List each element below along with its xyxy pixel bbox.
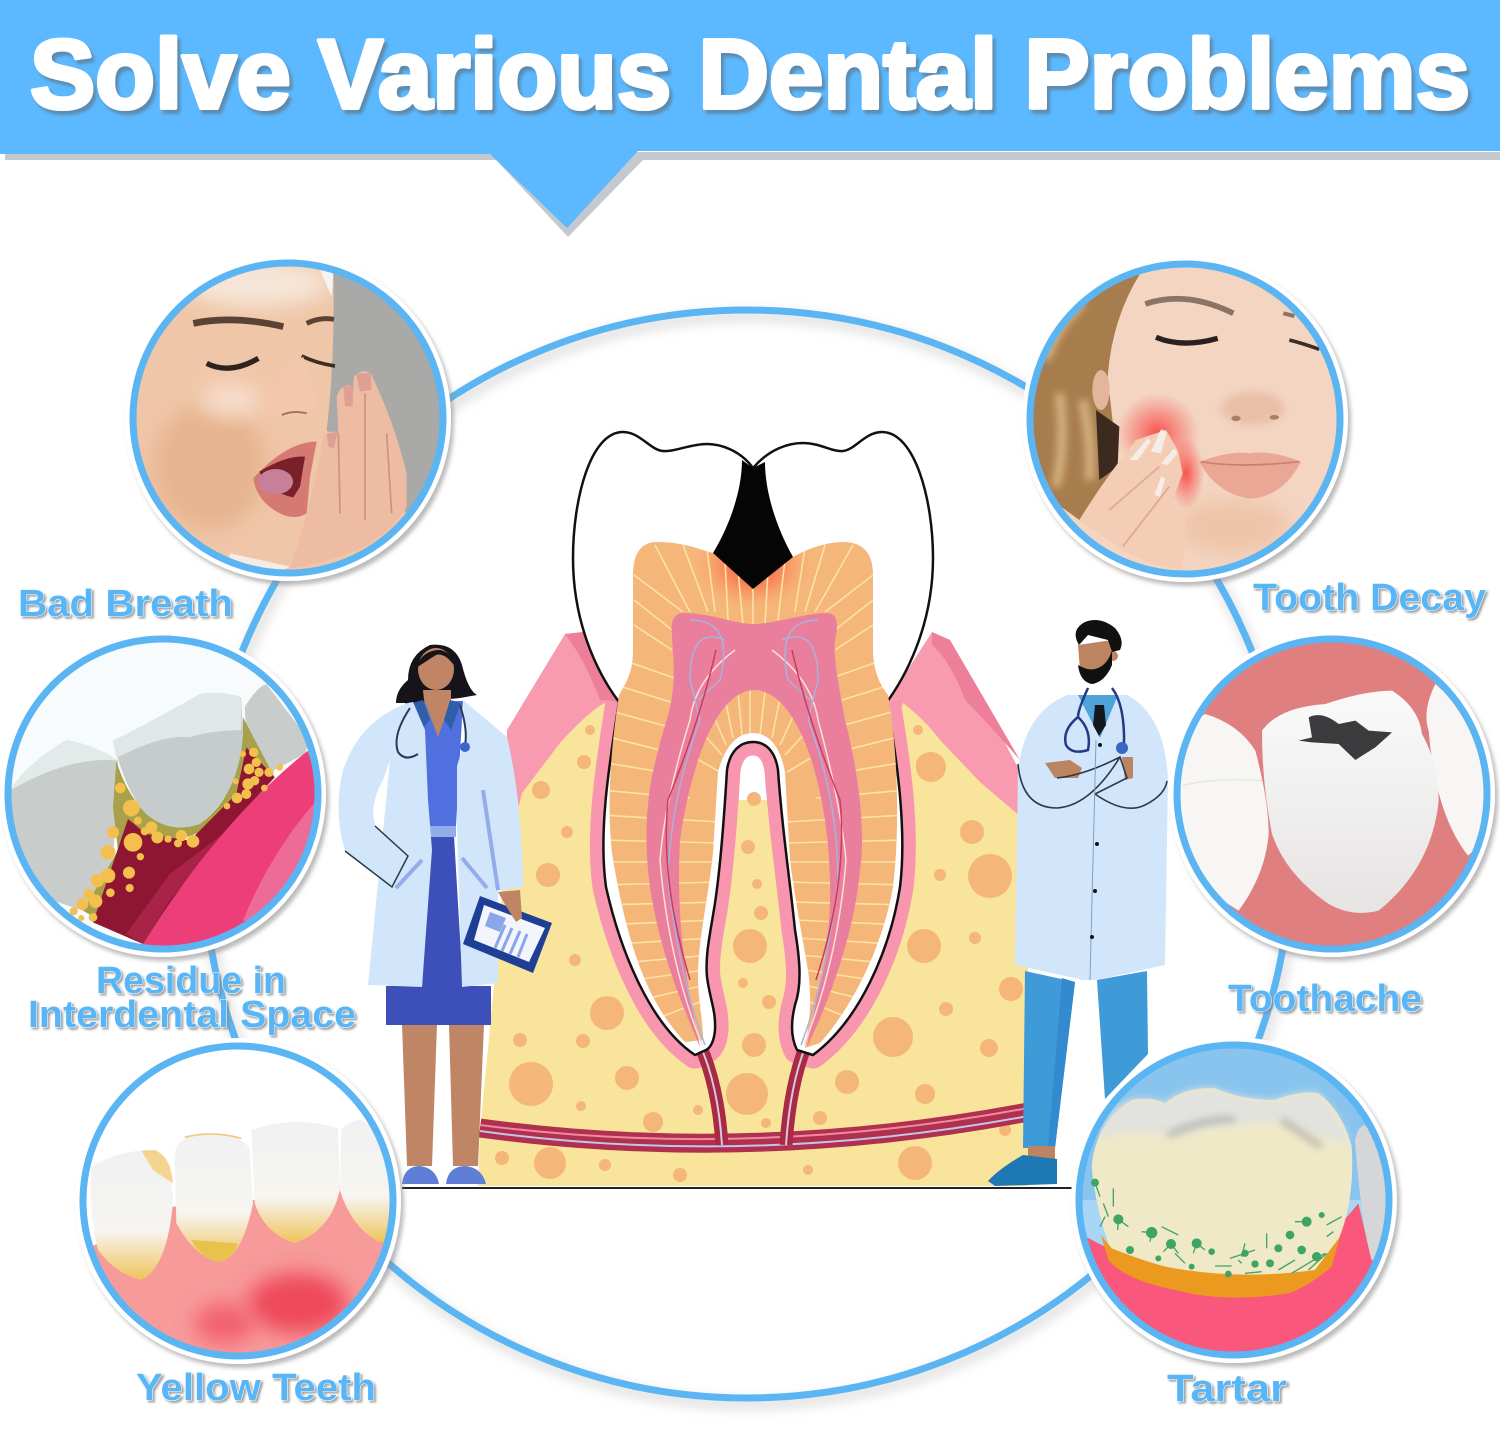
photo: yellow teeth (75, 1038, 401, 1364)
collar (412, 700, 461, 730)
nerve and blood vessels (480, 1045, 1028, 1146)
label: yellow teeth: Yellow Teeth (136, 1367, 376, 1409)
shirt (405, 701, 463, 826)
ankle (1028, 1146, 1055, 1160)
neck and face (423, 690, 451, 737)
label: residue in interdental space: Interdental Space (28, 994, 356, 1036)
dentin (610, 542, 898, 1048)
label: bad breath: Bad Breath (18, 583, 233, 625)
hand (498, 890, 522, 922)
trousers (1023, 971, 1075, 1148)
coat (338, 702, 432, 987)
clipboard (463, 896, 552, 973)
arm hand left (1045, 760, 1082, 778)
coat seam and buttons (1090, 740, 1102, 980)
shoes (402, 1166, 439, 1184)
arm outlines (1018, 757, 1167, 808)
photo: residue in interdental space (0, 631, 326, 957)
label: residue in interdental space (28, 960, 356, 1036)
label: residue in interdental space: Residue in (96, 960, 286, 1002)
head and beard (1078, 640, 1112, 684)
tooth enamel (573, 432, 933, 1055)
label: tartar: Tartar (1167, 1368, 1287, 1410)
belt (428, 826, 456, 837)
stethoscope (1065, 688, 1124, 752)
label: toothache: Toothache (1228, 978, 1422, 1020)
female doctor (338, 645, 552, 1184)
photo: tooth decay (1022, 256, 1348, 582)
photo: bad breath (125, 255, 451, 581)
title: Solve Various Dental Problems (30, 19, 1470, 129)
photo: toothache (1169, 631, 1495, 957)
arm hand right (1122, 757, 1133, 780)
jaw bone (478, 703, 1028, 1186)
label: tooth decay: Tooth Decay (1253, 577, 1486, 619)
coat details (345, 826, 408, 887)
root canal vessels (660, 620, 846, 1045)
gums (505, 632, 1030, 830)
shoe (988, 1155, 1057, 1186)
legs (402, 1024, 437, 1166)
periodontal band (603, 702, 902, 1055)
hair (396, 645, 477, 703)
stethoscope (396, 705, 466, 758)
skirt (422, 836, 463, 988)
male doctor (988, 620, 1168, 1186)
skirt hem (386, 986, 491, 1025)
shirt and tie (1078, 695, 1118, 738)
decay cavity (713, 460, 793, 589)
photo: tartar (1071, 1037, 1397, 1363)
lab coat (1015, 695, 1168, 980)
ground line (402, 1187, 1072, 1189)
pulp (646, 613, 862, 1047)
central tooth illustration (402, 432, 1072, 1188)
header banner (0, 0, 1500, 237)
large ring (203, 310, 1294, 1404)
